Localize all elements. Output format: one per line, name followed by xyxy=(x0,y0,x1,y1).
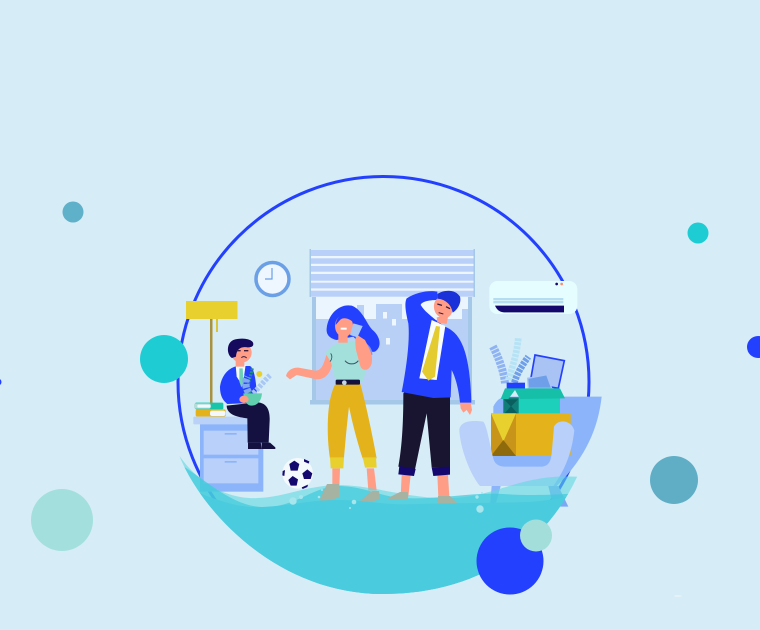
man scratching head xyxy=(398,291,472,497)
feet under water xyxy=(320,484,457,505)
boy sitting on cabinet with plant xyxy=(220,339,275,449)
decorative circle: small cyan upper right xyxy=(688,222,708,244)
decorative circle: mint bottom xyxy=(520,520,552,552)
solid water body xyxy=(200,494,566,594)
middle wave xyxy=(184,466,568,594)
filing cabinet with books xyxy=(193,403,263,492)
wall clock xyxy=(256,262,289,296)
decorative circle: pale mint lower left xyxy=(31,489,93,551)
large outlined circle xyxy=(178,176,589,588)
faint highlight lower right xyxy=(674,595,682,597)
air conditioner xyxy=(489,281,577,314)
decorative circle: large blue bottom xyxy=(476,528,544,594)
flood water xyxy=(170,440,590,600)
decorative circle: cyan on ring xyxy=(140,335,188,383)
decorative circle: small teal upper left xyxy=(62,202,84,222)
decorative circle: blue left edge xyxy=(0,378,2,386)
woman on phone xyxy=(286,305,380,491)
back wave xyxy=(170,440,590,600)
plant leaves xyxy=(493,337,528,387)
window with blinds xyxy=(310,249,475,404)
illustration: family in flooded room xyxy=(0,175,760,597)
soccer ball xyxy=(282,458,313,489)
decorative circle: blue right edge xyxy=(747,336,760,358)
decorative circle: teal lower right xyxy=(650,456,698,504)
floor lamp xyxy=(186,301,238,404)
bubbles xyxy=(289,489,484,513)
armchair with boxes and plant xyxy=(459,337,602,507)
